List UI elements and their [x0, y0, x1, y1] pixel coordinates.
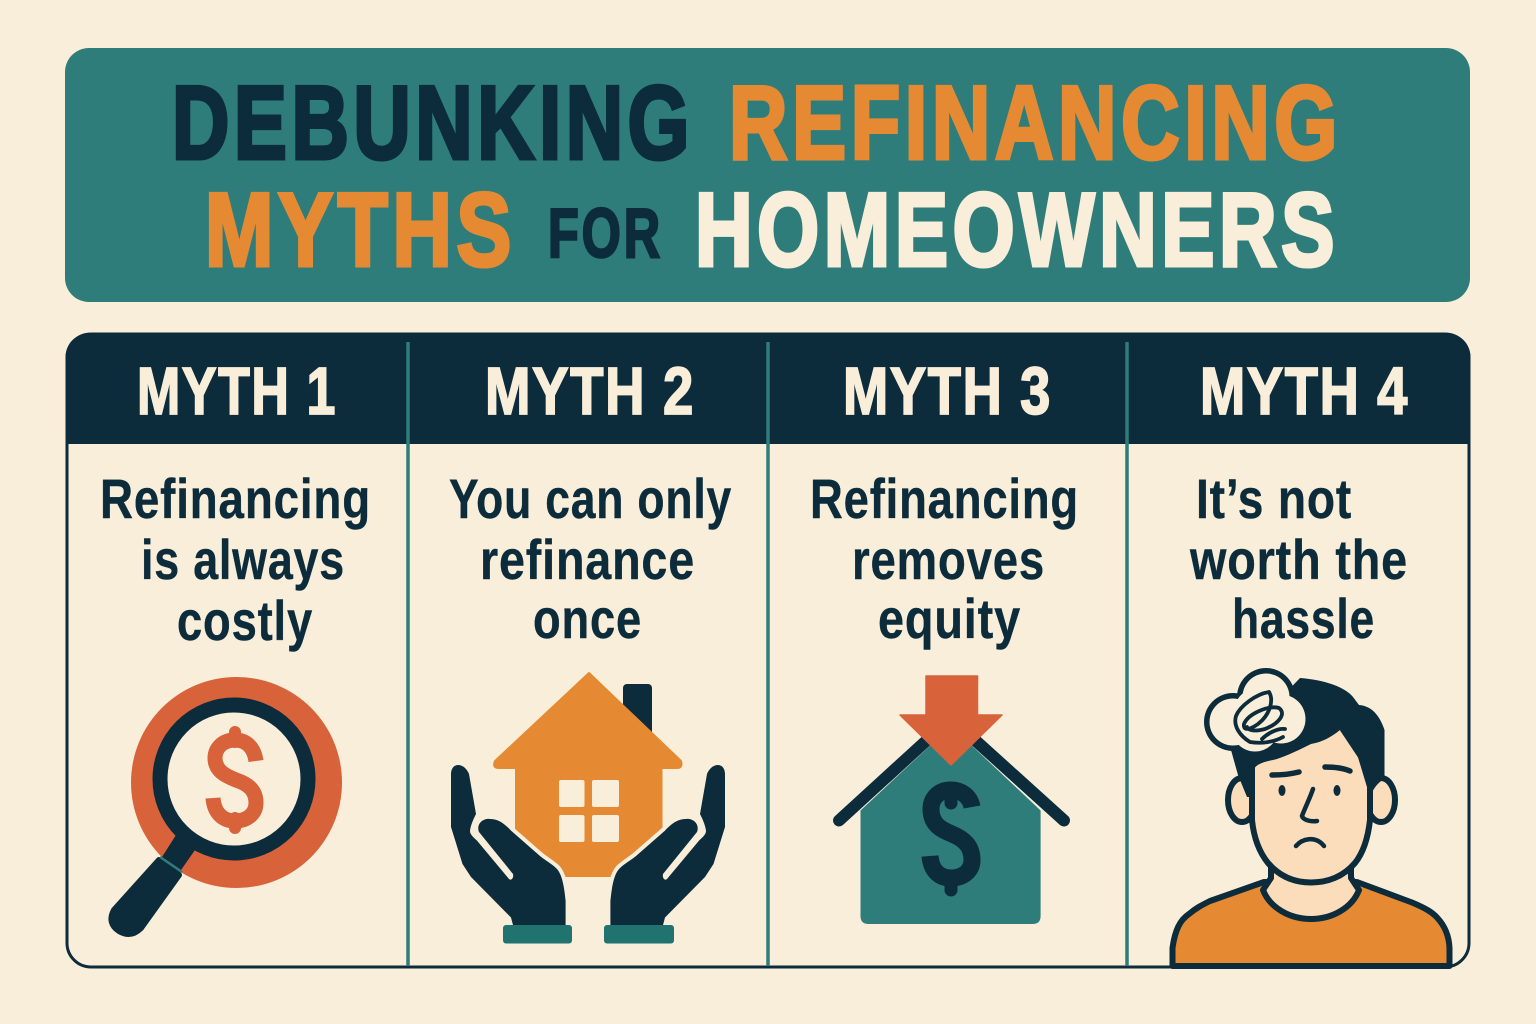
thought bubble	[1204, 668, 1311, 757]
myth 2 statement: refinance	[480, 528, 695, 591]
facial features	[1272, 767, 1350, 846]
myth 1 heading: MYTH 1	[137, 354, 337, 429]
title: for: FOR	[548, 194, 663, 272]
title: Homeowners: HOMEOWNERS	[695, 172, 1339, 288]
myth 2 heading: MYTH 2	[485, 354, 695, 429]
myth 4 statement: It’s not	[1196, 467, 1352, 530]
neck	[1263, 860, 1359, 919]
hair	[1231, 678, 1384, 797]
myth 1 statement: costly	[177, 589, 313, 652]
title: Myths: MYTHS	[205, 172, 516, 288]
title: Refinancing: REFINANCING	[729, 66, 1342, 182]
myth 2 statement: once	[533, 587, 642, 650]
myth 2 statement	[449, 467, 732, 650]
icon: magnifying glass over dollar sign	[111, 677, 342, 934]
shirt	[1172, 882, 1450, 966]
left cuff	[503, 925, 572, 944]
myth 2 statement: You can only	[449, 467, 732, 530]
column 3: myth 3	[810, 354, 1079, 924]
myth 1 statement	[100, 467, 371, 652]
myth 3 statement: removes	[852, 528, 1045, 591]
myth 4 statement: worth the	[1189, 528, 1408, 591]
title: Debunking: DEBUNKING	[172, 66, 694, 182]
right cuff	[604, 925, 674, 944]
column 1: myth 1	[100, 354, 371, 934]
icon: worried person with thought bubble	[1172, 668, 1450, 966]
title banner	[65, 48, 1470, 302]
myth 4 statement: hassle	[1232, 587, 1375, 650]
myth 4 heading: MYTH 4	[1200, 354, 1409, 429]
icon: house with down arrow	[839, 676, 1064, 924]
myth 3 statement: equity	[878, 587, 1021, 650]
column 2: myth 2	[449, 354, 732, 944]
left hand	[451, 765, 566, 925]
myth table panel	[66, 333, 1470, 967]
right hand	[610, 765, 725, 925]
myth 3 statement	[810, 467, 1079, 650]
column 4: myth 4	[1172, 354, 1450, 966]
myth 1 statement: Refinancing	[100, 467, 371, 530]
myth 4 statement	[1189, 467, 1408, 650]
myth 1 statement: is always	[141, 528, 345, 591]
icon: hands holding house	[451, 673, 725, 944]
myth 3 statement: Refinancing	[810, 467, 1079, 530]
ears	[1228, 778, 1256, 822]
myth 3 heading: MYTH 3	[843, 354, 1052, 429]
scribble	[1235, 692, 1285, 743]
face	[1252, 725, 1370, 882]
